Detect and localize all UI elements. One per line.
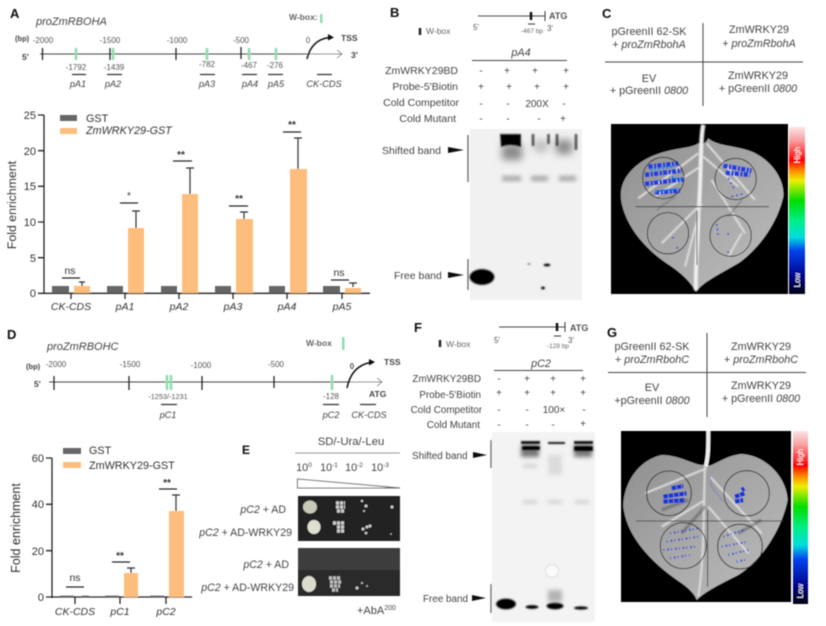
amplicon labels — [66, 60, 342, 89]
panel A: bar chart of fold enrichment — [5, 110, 370, 313]
y axis and ticks: 0 — [38, 592, 44, 604]
probe schematic: ATG — [570, 323, 588, 333]
base pair axis: (bp) — [15, 34, 30, 43]
construct labels — [198, 504, 294, 594]
category labels — [51, 301, 351, 313]
significance marks — [66, 478, 177, 587]
category labels: pC1 — [109, 606, 130, 618]
y axis and ticks: 20 — [32, 546, 44, 558]
color scale bar: High — [793, 147, 802, 163]
base pair axis: -1500 — [120, 360, 141, 369]
base pair axis: 3' — [351, 50, 358, 60]
probe schematic: 5' — [494, 336, 500, 345]
sample table: + — [496, 388, 502, 399]
leaf luminescence image — [621, 431, 791, 602]
amplicon labels: pC2 — [322, 410, 339, 420]
panel A: promoter diagram proZmRBOHA — [10, 6, 358, 89]
infiltration key: + proZmRbohC — [615, 354, 689, 366]
error bars — [127, 495, 180, 573]
amplicon labels: pA4 — [241, 79, 258, 89]
free band label: Free band — [423, 594, 468, 605]
probe schematic: W-box — [446, 339, 471, 349]
significance marks: ** — [288, 120, 296, 131]
sample table: - — [537, 114, 541, 125]
medium header: -2 — [357, 462, 363, 469]
significance marks: ns — [64, 265, 76, 277]
probe schematic: ATG — [549, 11, 567, 21]
infiltration key: EV — [645, 382, 660, 394]
infiltration key: + proZmRbohC — [724, 354, 798, 366]
construct labels: pC2 + AD-WRKY29 — [200, 582, 294, 594]
amplicon labels: pA1 — [69, 79, 86, 89]
y axis and ticks: Fold enrichment — [9, 483, 23, 573]
sample table: Probe-5'Biotin — [392, 81, 458, 93]
yeast plate with AbA — [298, 548, 400, 596]
sample table: ZmWRKY29BD — [385, 65, 458, 77]
promoter name: proZmRBOHA — [35, 16, 107, 28]
sample table: + — [524, 374, 530, 385]
category labels: pC2 — [155, 606, 176, 618]
infiltration key: + pGreenII 0800 — [719, 83, 797, 95]
construct labels: pC2 + AD — [242, 559, 289, 571]
AbA label: 200 — [384, 605, 396, 612]
amplicon labels: -1439 — [104, 63, 125, 72]
significance marks: ** — [177, 150, 185, 161]
y axis and ticks — [5, 110, 370, 300]
sample table: - — [525, 405, 529, 416]
amplicon labels: -276 — [267, 61, 284, 70]
legend — [60, 113, 173, 137]
category labels: CK-CDS — [55, 606, 95, 618]
y axis and ticks: 10 — [24, 217, 36, 229]
base pair axis: 5' — [22, 52, 29, 62]
medium header — [295, 436, 400, 474]
color scale bar: Low — [796, 583, 805, 598]
medium header: 10 — [345, 462, 357, 474]
panel letter C: C — [602, 6, 612, 21]
category labels: pA5 — [332, 301, 351, 313]
base pair axis — [15, 34, 358, 62]
gel image — [470, 129, 582, 300]
infiltration key: pGreenII 62-SK — [611, 26, 687, 38]
probe schematic — [420, 11, 567, 36]
amplicon labels: pC1 — [159, 410, 176, 420]
category labels: pA1 — [115, 301, 134, 313]
infiltration key: ZmWRKY29 — [731, 341, 791, 353]
sample table: - — [479, 66, 483, 77]
ZmWRKY29-GST bars — [74, 169, 361, 293]
medium header: -1 — [332, 462, 338, 469]
amplicon labels: -1253/-1231 — [148, 392, 188, 401]
sample table: + — [580, 419, 586, 430]
panel F: EMSA pC2 — [411, 320, 595, 622]
legend: ZmWRKY29-GST — [85, 125, 173, 137]
medium header: 0 — [308, 462, 312, 469]
infiltration key: pGreenII 62-SK — [614, 341, 690, 353]
shifted band label: Shifted band — [412, 451, 467, 462]
TSS arrow: TSS — [384, 357, 401, 367]
panel letter D: D — [7, 327, 16, 342]
sample table: Cold Competitor — [411, 405, 483, 416]
AbA label: +AbA — [357, 605, 384, 617]
panel G: luciferase assay proZmRbohC — [607, 325, 808, 604]
infiltration key: + pGreenII 0800 — [610, 85, 688, 97]
sample table: + — [506, 82, 512, 93]
sample table: Cold Mutant — [399, 113, 456, 125]
significance marks: ** — [116, 551, 124, 562]
sample table: - — [506, 99, 510, 110]
y axis and ticks: 25 — [24, 110, 36, 122]
base pair axis: -500 — [233, 36, 250, 45]
probe schematic: -467 bp — [521, 28, 543, 35]
panel letter A: A — [10, 6, 20, 21]
significance marks: ** — [235, 194, 243, 205]
medium header: SD/-Ura/-Leu — [318, 436, 384, 448]
legend: GST — [89, 445, 112, 457]
color scale bar — [793, 431, 808, 604]
GST bars — [60, 595, 164, 597]
sample table: - — [562, 99, 566, 110]
sample table: Probe-5'Biotin — [419, 390, 481, 401]
infiltration key: + proZmRbohA — [722, 38, 796, 50]
W-box legend — [306, 337, 344, 350]
free band label — [423, 584, 491, 613]
probe schematic: -128 bp — [547, 343, 569, 350]
infiltration key — [608, 333, 806, 417]
error bars — [79, 138, 357, 287]
amplicon labels: CK-CDS — [306, 79, 342, 89]
amplicon labels: CK-CDS — [351, 410, 387, 420]
probe schematic: 3' — [547, 24, 553, 33]
infiltration key — [605, 23, 803, 106]
infiltration key: + proZmRbohA — [612, 39, 686, 51]
sample table: - — [479, 114, 483, 125]
probe schematic — [440, 322, 588, 350]
legend: GST — [86, 113, 109, 125]
panel D: promoter diagram proZmRBOHC — [7, 327, 401, 420]
significance marks — [62, 120, 349, 280]
shifted band label — [412, 440, 491, 468]
TSS arrow — [347, 357, 401, 399]
base pair axis: -2000 — [33, 36, 54, 45]
sample table: + — [532, 66, 538, 77]
W-box legend: W-box — [306, 338, 332, 348]
infiltration key: ZmWRKY29 — [729, 24, 789, 36]
significance marks: * — [127, 191, 131, 202]
panel letter E: E — [242, 443, 250, 457]
shifted band label: Shifted band — [382, 145, 441, 157]
infiltration key: ZmWRKY29 — [728, 70, 788, 82]
probe schematic: W-box — [426, 26, 451, 36]
base pair axis: 0 — [306, 36, 311, 45]
significance marks: ns — [333, 267, 345, 279]
sample table: + — [550, 374, 556, 385]
construct labels: pC2 + AD-WRKY29 — [198, 527, 292, 539]
sample table: Cold Competitor — [383, 97, 459, 109]
y axis and ticks: 40 — [32, 499, 44, 511]
sample table: - — [497, 420, 501, 431]
TSS arrow: TSS — [341, 33, 358, 43]
sample table: + — [504, 66, 510, 77]
amplicon labels: -128 — [323, 392, 340, 401]
amplicon labels: -1792 — [66, 63, 87, 72]
category labels: pA4 — [277, 301, 296, 313]
base pair axis: -1000 — [191, 361, 212, 370]
significance marks: ** — [163, 478, 171, 489]
medium header: 10 — [320, 462, 332, 474]
sample table — [411, 358, 586, 431]
color scale bar — [789, 127, 805, 294]
panel C: luciferase assay proZmRbohA — [602, 6, 805, 294]
probe schematic: 3' — [568, 336, 574, 345]
sample table: pC2 — [530, 358, 551, 370]
TSS arrow — [307, 33, 358, 59]
sample table: - — [479, 99, 483, 110]
y axis and ticks: 15 — [24, 181, 36, 193]
base pair axis: -500 — [268, 360, 285, 369]
category labels: pA3 — [223, 301, 242, 313]
leaf luminescence image — [611, 124, 788, 294]
sample table: + — [580, 388, 586, 399]
amplicon labels: pA3 — [198, 79, 216, 89]
y axis and ticks: Fold enrichment — [5, 160, 19, 249]
GST bars — [52, 286, 340, 293]
y axis and ticks: 20 — [24, 146, 36, 158]
sample table: pA4 — [510, 47, 531, 59]
sample table: - — [582, 405, 586, 416]
panel letter B: B — [390, 5, 399, 20]
amplicon labels: pA5 — [267, 79, 285, 89]
y axis and ticks: 60 — [32, 453, 44, 465]
medium header: 10 — [371, 462, 383, 474]
panel D: bar chart of fold enrichment — [9, 445, 192, 618]
color scale bar: Low — [793, 272, 802, 287]
sample table: + — [563, 82, 569, 93]
sample table: - — [497, 405, 501, 416]
infiltration key: ZmWRKY29 — [731, 380, 791, 392]
construct labels: pC2 + AD — [239, 504, 286, 516]
legend — [63, 445, 175, 472]
color scale bar: High — [796, 449, 805, 465]
sample table: - — [551, 420, 555, 431]
dilution triangle — [298, 479, 400, 488]
sample table — [383, 47, 569, 125]
sample table: ZmWRKY29BD — [412, 374, 481, 385]
base pair axis: (bp) — [26, 362, 41, 371]
medium header: -3 — [383, 462, 389, 469]
sample table: + — [580, 374, 586, 385]
category labels — [55, 606, 176, 618]
amplicon labels — [148, 392, 387, 420]
TSS arrow: ATG — [369, 389, 387, 399]
y axis and ticks: 0 — [30, 288, 36, 300]
base pair axis: -1000 — [167, 36, 188, 45]
free band label — [394, 259, 468, 290]
ZmWRKY29-GST bars — [124, 511, 184, 597]
significance marks: ns — [69, 572, 81, 584]
infiltration key: + pGreenII 0800 — [722, 393, 800, 405]
gel image — [492, 432, 595, 622]
sample table: + — [563, 66, 569, 77]
base pair axis: 5' — [34, 379, 41, 389]
sample table: - — [506, 114, 510, 125]
legend: ZmWRKY29-GST — [89, 460, 175, 472]
promoter name: proZmRBOHC — [46, 341, 119, 353]
medium header: 10 — [296, 462, 308, 474]
sample table: + — [560, 114, 566, 125]
sample table: - — [525, 420, 529, 431]
category labels: CK-CDS — [51, 301, 91, 313]
sample table: 200X — [525, 99, 549, 110]
free band label: Free band — [394, 270, 442, 282]
yeast plate without AbA — [298, 496, 400, 541]
category labels: pA2 — [169, 301, 188, 313]
shifted band label — [382, 135, 468, 182]
y axis and ticks: 5 — [30, 253, 36, 265]
y axis and ticks — [9, 453, 192, 604]
infiltration key: EV — [642, 73, 657, 85]
panel letter F: F — [414, 320, 422, 335]
base pair axis: -1500 — [100, 36, 121, 45]
base pair axis — [26, 360, 382, 390]
panel B: EMSA pA4 — [382, 5, 582, 300]
sample table: + — [478, 82, 484, 93]
W-box legend: W-box: — [289, 12, 318, 22]
panel letter G: G — [607, 325, 617, 340]
amplicon labels: pA2 — [104, 79, 121, 89]
panel E: yeast one-hybrid — [198, 436, 400, 617]
amplicon labels: -782 — [199, 60, 216, 69]
sample table: - — [497, 374, 501, 385]
sample table: + — [550, 388, 556, 399]
sample table: + — [534, 82, 540, 93]
sample table: Cold Mutant — [427, 420, 480, 431]
infiltration key: +pGreenII 0800 — [614, 395, 690, 407]
base pair axis: 0 — [350, 362, 355, 371]
sample table: + — [524, 388, 530, 399]
amplicon labels: -467 — [241, 61, 258, 70]
base pair axis: -2000 — [46, 360, 67, 369]
sample table: 100× — [543, 405, 565, 416]
probe schematic: 5' — [473, 23, 479, 32]
